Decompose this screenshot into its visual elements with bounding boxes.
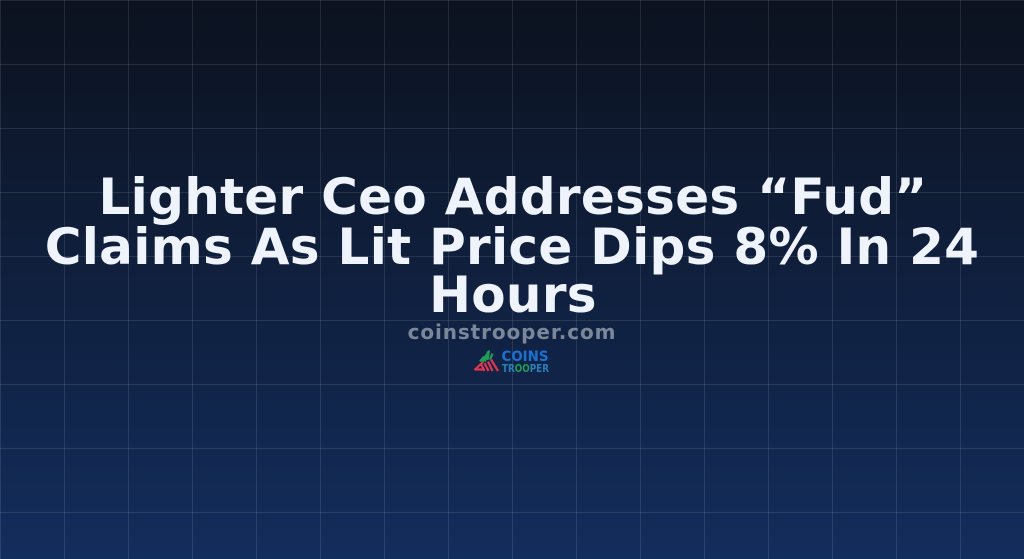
wordmark: COINS: COINS [502, 349, 548, 365]
logo: CoinsTrooper [474, 349, 549, 374]
website address: coinstrooper.com [408, 320, 616, 344]
icon: green rising stripes [480, 350, 492, 362]
icon: red falling stripes [474, 360, 498, 371]
title: Lighter Ceo Addresses “Fud” [99, 168, 927, 226]
title [45, 168, 979, 324]
title: Hours [429, 266, 597, 324]
title: Claims As Lit Price Dips 8% In 24 [45, 218, 979, 276]
